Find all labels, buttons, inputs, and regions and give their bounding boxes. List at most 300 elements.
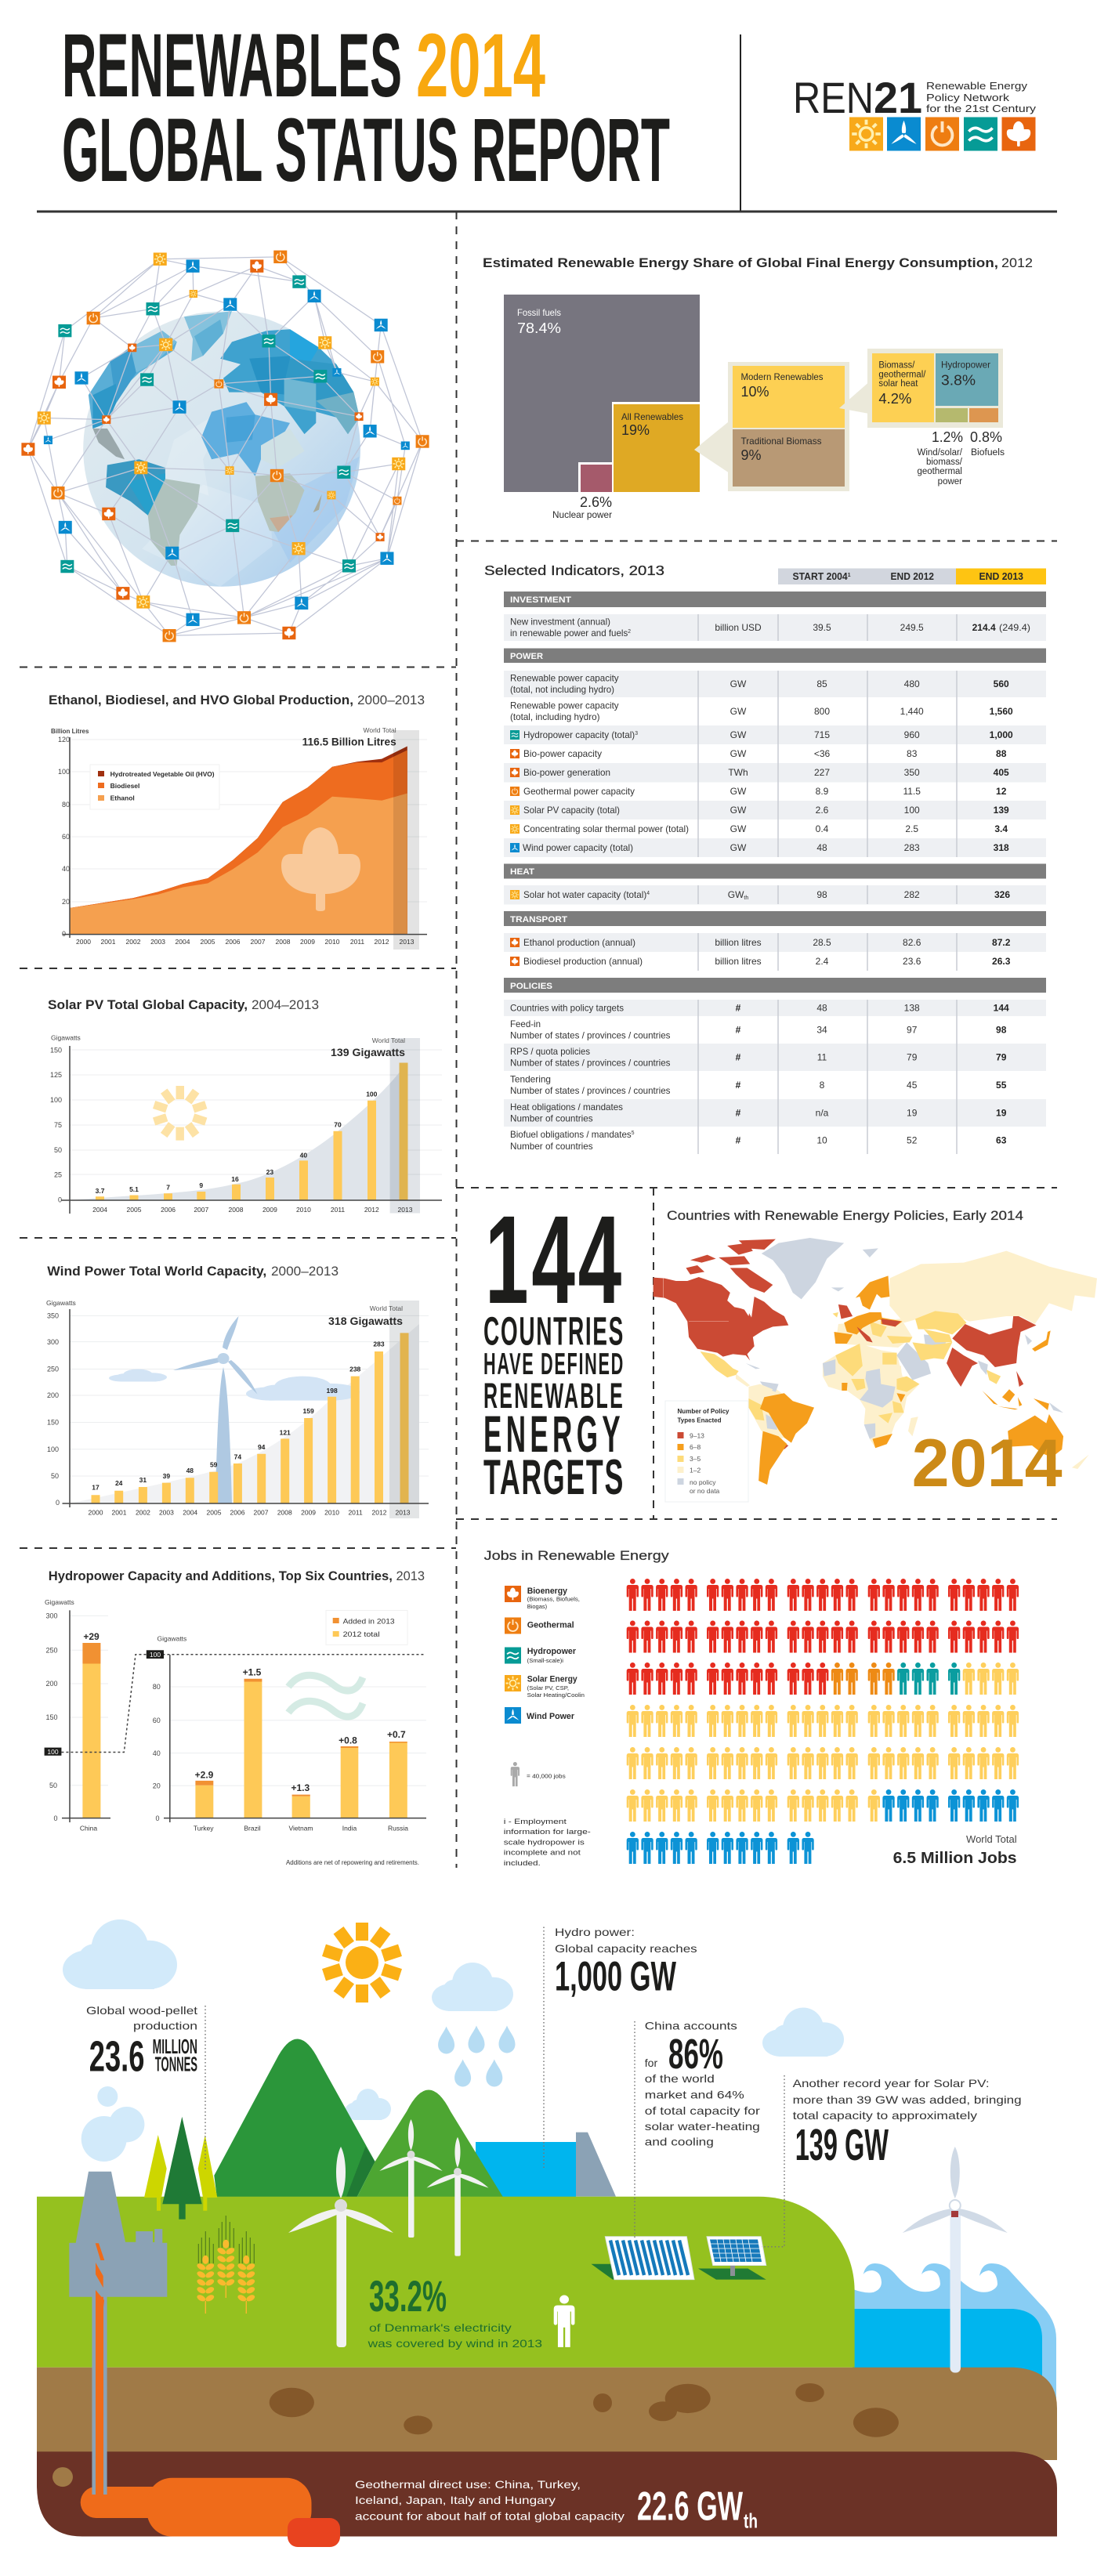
callout: 144 countries: HAVE DEFINED	[483, 1348, 625, 1381]
callout: wood pellets: production	[133, 2020, 197, 2032]
chart: solar PV capacity: 7	[166, 1183, 170, 1191]
table: selected indicators: in renewable power and fuels	[510, 628, 632, 639]
chart: ethanol, biodiesel and HVO area chart: 2006	[226, 938, 241, 946]
table: selected indicators: 2.4	[816, 956, 829, 967]
chart: wind power capacity: 2013	[396, 1509, 411, 1517]
chart: wind power capacity: 48	[186, 1467, 194, 1474]
chart: hydropower capacity and additions: Additions are net of repowering and retirements.	[286, 1859, 419, 1866]
icon: offshore wind turbine	[903, 2147, 1008, 2372]
table: selected indicators: Number of states / provinces / countries	[510, 1029, 671, 1040]
chart: hydropower capacity and additions: 0	[155, 1814, 160, 1822]
legend: jobs: Hydropower	[527, 1647, 577, 1656]
table: selected indicators: 715	[814, 729, 830, 740]
table: selected indicators: 2	[628, 629, 631, 635]
legend: jobs: incomplete and not	[504, 1849, 581, 1857]
icon: biomass leaf	[281, 827, 360, 911]
chart: wind power capacity: 24	[115, 1479, 123, 1487]
chart: wind power capacity: 100	[47, 1445, 59, 1453]
table: selected indicators: 82.6	[903, 937, 921, 948]
callout: Denmark wind: was covered by wind in 2013	[367, 2337, 542, 2350]
chart: solar PV capacity: 2005	[127, 1206, 142, 1214]
callout: China solar: China accounts	[645, 2020, 737, 2032]
chart: solar PV capacity: 5.1	[129, 1185, 139, 1193]
chart: solar PV capacity: 100	[50, 1096, 62, 1104]
icon: wind turbine large	[288, 2147, 393, 2347]
table: selected indicators: 405	[994, 767, 1009, 778]
chart: energy share treemap: Traditional Biomass	[741, 436, 821, 447]
chart: wind power capacity: Gigawatts	[46, 1299, 76, 1307]
table: selected indicators: GW	[730, 823, 747, 834]
table: selected indicators: Hydropower capacity (total)	[523, 729, 638, 740]
chart: ethanol, biodiesel and HVO area chart: 2010	[325, 938, 340, 946]
chart: wind power capacity: 94	[258, 1443, 266, 1451]
table: selected indicators: RPS / quota policies	[510, 1046, 590, 1057]
table: selected indicators: Feed-in	[510, 1018, 541, 1029]
chart: energy share treemap: biomass/	[926, 458, 963, 467]
callout: 144 countries: ENERGY	[483, 1405, 625, 1463]
chart: hydropower capacity and additions: Vietnam	[288, 1824, 313, 1832]
chart: solar PV capacity: 16	[231, 1175, 239, 1183]
soil stones	[270, 2383, 899, 2437]
table: selected indicators: 960	[904, 729, 920, 740]
table: selected indicators: POWER	[510, 652, 543, 661]
chart: ethanol, biodiesel and HVO area chart	[51, 726, 427, 950]
table: selected indicators: 480	[904, 678, 920, 689]
legend: policy types: 9–13	[690, 1432, 704, 1440]
REN21 logo: Renewable Energy	[926, 80, 1028, 92]
chart: hydropower capacity and additions: 200	[45, 1680, 58, 1688]
chart: wind power capacity: 121	[280, 1429, 291, 1437]
chart: wind power capacity: 2008	[277, 1509, 292, 1517]
table: selected indicators: Solar hot water capacity (total)	[523, 889, 650, 900]
legend: hydropower: 2012 total	[343, 1630, 380, 1639]
chart: energy share treemap: solar heat	[878, 379, 918, 389]
table: selected indicators: 10	[816, 1134, 827, 1145]
chart: wind power capacity: 350	[47, 1312, 59, 1319]
table: selected indicators: Wind power capacity (total)	[523, 842, 633, 853]
heading: ethanol chart: 2000–2013	[357, 693, 425, 707]
legend: policy types: Types Enacted	[677, 1416, 721, 1424]
callout: China solar: for	[645, 2057, 657, 2069]
legend: jobs: = 40,000 jobs	[527, 1772, 566, 1780]
legend: policy types: 3–5	[690, 1455, 701, 1463]
table: selected indicators: 282	[904, 889, 920, 900]
table: selected indicators: 214.4	[972, 622, 996, 633]
chart: wind power capacity: 318 Gigawatts	[328, 1315, 403, 1327]
land: bedrock	[37, 2451, 1057, 2537]
chart: energy share treemap: 1.2%	[932, 429, 963, 445]
chart: wind power capacity: 39	[163, 1472, 170, 1480]
callout: wood pellets: MILLION	[153, 2035, 197, 2058]
icon: cloud near hydro	[762, 2007, 844, 2057]
table: selected indicators: #	[736, 1051, 741, 1062]
table: selected indicators: 5	[632, 1131, 635, 1136]
icon: small cloud	[345, 2089, 391, 2120]
callout: China solar: 86%	[668, 2031, 723, 2078]
header title: RENEWABLES	[62, 16, 402, 116]
callout: geothermal: Geothermal direct use: China, Turkey,	[355, 2478, 581, 2491]
table: selected indicators: Number of states / provinces / countries	[510, 1085, 671, 1096]
chart: ethanol, biodiesel and HVO area chart: 2011	[350, 938, 364, 946]
table: selected indicators: GW	[728, 889, 744, 900]
chart: wind power capacity: 283	[373, 1340, 385, 1348]
callout: geothermal: Iceland, Japan, Italy and Hungary	[355, 2494, 556, 2506]
heading: energy share: 2012	[1001, 255, 1033, 270]
illustration: renewable energy landscape	[37, 1919, 1057, 2547]
table: selected indicators: 79	[907, 1051, 918, 1062]
table: selected indicators: 19	[996, 1108, 1007, 1119]
callout: solar PV: Another record year for Solar PV:	[793, 2077, 990, 2089]
table: selected indicators: Geothermal power capacity	[523, 786, 635, 797]
callout: geothermal: account for about half of total global capacity	[355, 2509, 625, 2522]
chart: solar PV capacity: 23	[266, 1168, 273, 1176]
chart: ethanol, biodiesel and HVO area chart: 2012	[375, 938, 389, 946]
legend: jobs: Geothermal	[527, 1620, 574, 1630]
callout: 144 countries: RENEWABLE	[483, 1376, 625, 1416]
chart: wind power capacity: World Total	[370, 1304, 403, 1312]
chart: energy share treemap: 19%	[621, 422, 650, 438]
legend: biofuels: Biodiesel	[110, 782, 139, 790]
table: selected indicators: 139	[994, 805, 1009, 816]
table: selected indicators: 144	[994, 1003, 1009, 1014]
table: selected indicators: 12	[996, 786, 1007, 797]
chart: ethanol, biodiesel and HVO area chart: 60	[62, 833, 70, 841]
chart: wind power capacity: 17	[92, 1484, 100, 1492]
table: selected indicators: <36	[814, 748, 831, 759]
chart: ethanol, biodiesel and HVO area chart: 2000	[76, 938, 91, 946]
table: selected indicators: 1,440	[900, 706, 924, 717]
chart: energy share treemap: 78.4%	[517, 320, 561, 336]
chart: solar PV capacity: 70	[334, 1120, 342, 1128]
legend: jobs: Biogas)	[527, 1603, 548, 1610]
sea water	[853, 2309, 1042, 2397]
pictogram: jobs by technology	[627, 1579, 1019, 1864]
chart: energy share treemap: 2.6%	[580, 494, 612, 510]
callout: solar PV: more than 39 GW was added, bringing	[793, 2093, 1022, 2106]
legend: biofuels	[90, 765, 219, 809]
chart: energy share treemap: geothermal	[917, 467, 962, 476]
table: selected indicators: GW	[730, 786, 747, 797]
table: selected indicators: 3.4	[994, 823, 1008, 834]
table: selected indicators: 48	[816, 842, 827, 853]
table: selected indicators: GW	[730, 678, 747, 689]
mountains	[214, 2039, 504, 2198]
chart: wind power capacity: 0	[56, 1499, 60, 1507]
chart: ethanol, biodiesel and HVO area chart: 20	[62, 898, 70, 906]
chart: energy share treemap: Biomass/	[878, 360, 915, 370]
chart: hydropower capacity and additions: 100	[150, 1651, 161, 1659]
chart: ethanol, biodiesel and HVO area chart: 2001	[101, 938, 116, 946]
callout: geothermal: th	[744, 2509, 758, 2533]
table: selected indicators: GW	[730, 748, 747, 759]
table: selected indicators: #	[736, 1003, 741, 1014]
header title: 2014	[416, 16, 545, 116]
legend: biofuels: Hydrotreated Vegetable Oil (HVO)	[110, 770, 215, 778]
table: selected indicators: (249.4)	[999, 622, 1030, 633]
icon: wind turbine small	[426, 2137, 489, 2256]
icon: geothermal plant with pipe	[69, 2086, 167, 2495]
chart: wind power capacity: 2002	[136, 1509, 150, 1517]
chart: ethanol, biodiesel and HVO area chart: 2003	[150, 938, 165, 946]
callout: hydro power	[555, 1926, 697, 1999]
chart: wind power capacity: 2004	[183, 1509, 197, 1517]
heading: ethanol chart: Ethanol, Biodiesel, and HVO Global Production,	[49, 693, 353, 707]
callout: hydro power: Global capacity reaches	[555, 1942, 697, 1955]
callout: China solar: of total capacity for	[645, 2104, 760, 2117]
chart: energy share treemap: 0.8%	[970, 429, 1002, 445]
table: selected indicators: 98	[816, 889, 827, 900]
callout: hydro power: 1,000 GW	[555, 1953, 676, 1999]
chart: hydropower capacity and additions: Gigawatts	[45, 1598, 74, 1606]
table: selected indicators: Bio-power capacity	[523, 748, 602, 759]
chart: wind power capacity: 2003	[159, 1509, 174, 1517]
chart: wind power capacity: 2001	[112, 1509, 127, 1517]
chart: ethanol, biodiesel and HVO area chart: 2002	[126, 938, 141, 946]
legend: policy types: or no data	[690, 1487, 720, 1495]
icon: sun	[153, 1086, 207, 1141]
table: selected indicators: 87.2	[992, 937, 1011, 948]
legend: jobs: (Small-scale)i	[527, 1657, 563, 1664]
callout: China solar: market and 64%	[645, 2089, 744, 2101]
table: selected indicators: 318	[994, 842, 1009, 853]
heading: solar chart: 2004–2013	[252, 997, 319, 1012]
chart: hydropower capacity and additions: 40	[153, 1749, 161, 1757]
table: selected indicators: 52	[907, 1134, 918, 1145]
REN21 logo: for the 21st Century	[926, 103, 1037, 114]
table: selected indicators: GW	[730, 729, 747, 740]
table: selected indicators: Bio-power generation	[523, 767, 610, 778]
table: selected indicators: TWh	[728, 767, 748, 778]
chart: solar PV capacity: 40	[300, 1152, 307, 1160]
chart: wind power capacity: 2010	[324, 1509, 339, 1517]
chart: solar PV capacity: 2012	[364, 1206, 379, 1214]
table: selected indicators: Concentrating solar thermal power (total)	[523, 823, 689, 834]
map: countries with renewable energy policies: 2014	[912, 1426, 1063, 1501]
chart: hydropower capacity and additions: +0.7	[387, 1729, 406, 1740]
icon: wheat	[196, 2216, 256, 2314]
table: selected indicators: Heat obligations / mandates	[510, 1102, 623, 1113]
table: selected indicators: END 2013	[979, 571, 1023, 582]
callout: geothermal	[355, 2478, 758, 2533]
chart: energy share treemap: Biofuels	[971, 448, 1005, 458]
chart: energy share treemap: 10%	[741, 384, 769, 400]
chart: hydropower capacity and additions: 50	[49, 1782, 57, 1789]
chart: wind power capacity: 2007	[254, 1509, 269, 1517]
chart: wind power capacity: 2011	[348, 1509, 363, 1517]
callout: Denmark wind	[367, 2271, 542, 2350]
table: selected indicators: 283	[904, 842, 920, 853]
chart: energy share treemap: Modern Renewables	[741, 371, 823, 382]
table: selected indicators: 249.5	[900, 622, 924, 633]
chart: hydropower capacity and additions: 250	[45, 1647, 58, 1655]
table: selected indicators: th	[744, 895, 748, 901]
table: selected indicators: 1,560	[990, 706, 1013, 717]
chart: hydropower capacity and additions: +0.8	[339, 1735, 357, 1746]
chart: hydropower capacity and additions: India	[342, 1824, 357, 1832]
chart: wind power capacity: 2000	[89, 1509, 103, 1517]
legend: jobs: information for large-	[504, 1828, 591, 1836]
table: selected indicators: Renewable power capacity	[510, 700, 619, 711]
table: selected indicators: 8	[820, 1080, 825, 1091]
table: selected indicators: 227	[814, 767, 830, 778]
chart: solar PV capacity: 2010	[296, 1206, 311, 1214]
legend: jobs: Bioenergy	[527, 1586, 568, 1596]
REN21 logo: REN	[793, 73, 874, 122]
table: selected indicators: END 2012	[890, 571, 934, 582]
chart: ethanol, biodiesel and HVO area chart: 100	[58, 768, 70, 776]
table: selected indicators: 28.5	[813, 937, 831, 948]
legend: policy types: no policy	[690, 1478, 716, 1486]
legend: hydropower	[326, 1611, 407, 1645]
sea waves	[853, 2263, 1056, 2413]
chart: wind power capacity: 198	[327, 1387, 338, 1395]
table: selected indicators: 88	[996, 748, 1007, 759]
icon: clouds and turbine	[109, 1316, 360, 1503]
table: selected indicators: GW	[730, 805, 747, 816]
icon: person	[554, 2296, 574, 2347]
table: selected indicators: Tendering	[510, 1073, 551, 1084]
chart: wind power capacity: 74	[234, 1453, 241, 1460]
callout: wood pellets: TONNES	[155, 2053, 197, 2076]
heading: jobs: Jobs in Renewable Energy	[484, 1548, 669, 1563]
icon: large cloud	[63, 1919, 177, 1989]
chart: solar PV capacity: 9	[199, 1181, 203, 1189]
chart: solar PV capacity: 125	[50, 1071, 62, 1079]
chart: wind power capacity: 200	[47, 1391, 59, 1399]
table: selected indicators: Biodiesel production (annual)	[523, 956, 643, 967]
chart: energy share treemap: geothermal/	[878, 370, 926, 379]
table: selected indicators: TRANSPORT	[510, 915, 567, 924]
heading: solar chart: Solar PV Total Global Capacity,	[48, 997, 248, 1012]
chart: energy share treemap: power	[938, 477, 962, 487]
heading: hydropower chart: Hydropower Capacity and Additions, Top Six Countries,	[49, 1568, 393, 1583]
table: selected indicators: 3	[635, 731, 638, 736]
legend: jobs: i - Employment	[504, 1818, 567, 1826]
legend: policy types	[665, 1401, 748, 1502]
chart: hydropower capacity and additions: 300	[45, 1612, 58, 1620]
chart: hydropower capacity and additions: 80	[153, 1683, 161, 1691]
legend: hydropower: Added in 2013	[343, 1617, 395, 1626]
chart: ethanol, biodiesel and HVO area chart: 116.5 Billion Litres	[302, 736, 396, 747]
table: selected indicators: billion USD	[715, 622, 762, 633]
chart: wind power capacity: 238	[349, 1365, 361, 1373]
table: selected indicators: 98	[996, 1025, 1007, 1036]
chart: wind power capacity: 150	[47, 1418, 59, 1426]
table: selected indicators: 8.9	[816, 786, 829, 797]
legend: jobs: scale hydropower is	[504, 1838, 585, 1847]
table: selected indicators: Renewable power capacity	[510, 672, 619, 683]
table: selected indicators: Number of states / provinces / countries	[510, 1058, 671, 1069]
chart: wind power capacity: 50	[51, 1472, 59, 1480]
table: selected indicators: Solar PV capacity (total)	[523, 805, 620, 816]
table: selected indicators: 79	[996, 1051, 1007, 1062]
table: selected indicators: 2.6	[816, 805, 829, 816]
land: grass	[37, 2197, 855, 2368]
callout: world total jobs: 6.5 Million Jobs	[893, 1850, 1017, 1867]
chart: solar PV capacity: 75	[54, 1121, 62, 1129]
map: countries with renewable energy policies	[653, 1238, 1097, 1502]
chart: solar PV capacity: 100	[366, 1091, 378, 1098]
chart: hydropower capacity and additions: China	[80, 1824, 97, 1832]
table: selected indicators: 39.5	[813, 622, 831, 633]
chart: ethanol, biodiesel and HVO area chart: 40	[62, 865, 70, 873]
REN21 logo	[793, 73, 1037, 150]
chart: ethanol, biodiesel and HVO area chart: 2007	[251, 938, 266, 946]
chart: wind power capacity: 250	[47, 1365, 59, 1373]
table: selected indicators: GW	[730, 842, 747, 853]
chart: solar PV capacity: 3.7	[96, 1187, 105, 1195]
chart: wind power capacity: 2006	[230, 1509, 245, 1517]
callout: 144 countries: TARGETS	[483, 1450, 625, 1505]
legend: jobs: Solar Heating/Coolin	[527, 1691, 585, 1699]
chart: solar PV capacity: 50	[54, 1146, 62, 1154]
table: selected indicators: Number of countries	[510, 1113, 593, 1123]
heading: policy map: Countries with Renewable Energy Policies, Early 2014	[667, 1208, 1023, 1223]
chart: solar PV capacity: 150	[50, 1047, 62, 1055]
REN21 logo: 21	[874, 73, 922, 122]
legend: jobs: (Solar PV, CSP,	[527, 1684, 569, 1691]
chart: hydropower capacity and additions: Russia	[388, 1824, 408, 1832]
table: selected indicators: 26.3	[992, 956, 1011, 967]
icon: sun	[322, 1923, 402, 2003]
legend: jobs: Solar Energy	[527, 1675, 578, 1684]
chart: wind power capacity	[46, 1299, 429, 1518]
table: selected indicators: GW	[730, 706, 747, 717]
icon: rain cloud	[432, 1963, 513, 2011]
chart: energy share treemap: Hydropower	[941, 359, 990, 370]
table: selected indicators: START 2004	[793, 571, 849, 582]
legend: biofuels: Ethanol	[110, 794, 135, 802]
icon: wind turbine medium	[379, 2119, 443, 2238]
callout: geothermal: 22.6 GW	[637, 2484, 744, 2529]
chart: wind power capacity: 2009	[301, 1509, 316, 1517]
table: selected indicators: 350	[904, 767, 920, 778]
callout: Denmark wind: 33.2%	[369, 2271, 447, 2321]
chart: solar PV capacity: 2006	[161, 1206, 176, 1214]
lake and dam	[476, 2133, 616, 2198]
table: selected indicators: (total, including hydro)	[510, 711, 600, 722]
table: selected indicators: 800	[814, 706, 830, 717]
chart: hydropower capacity and additions: +1.5	[243, 1667, 262, 1678]
table: selected indicators: #	[736, 1025, 741, 1036]
chart: ethanol, biodiesel and HVO area chart: 0	[62, 930, 66, 938]
table: selected indicators: 97	[907, 1025, 918, 1036]
chart: solar PV capacity	[50, 1034, 442, 1214]
callout: wood pellets	[86, 2004, 197, 2081]
chart: solar PV capacity: World Total	[372, 1037, 405, 1044]
table: selected indicators: New investment (annual)	[510, 616, 610, 627]
table: selected indicators	[504, 569, 1046, 1154]
land: soil	[37, 2368, 1057, 2460]
chart: energy share treemap: 3.8%	[941, 373, 976, 389]
table: selected indicators: INVESTMENT	[510, 595, 571, 605]
table: selected indicators: 100	[904, 805, 920, 816]
chart: solar PV capacity: 2009	[262, 1206, 277, 1214]
table: selected indicators: 11.5	[903, 786, 921, 797]
callout: China solar	[645, 2020, 760, 2148]
table: selected indicators: 11	[817, 1051, 827, 1062]
chart: hydropower capacity and additions: 60	[153, 1717, 161, 1724]
chart: energy share treemap	[504, 295, 1005, 520]
legend: policy types: 1–2	[690, 1467, 701, 1474]
chart: hydropower capacity and additions: 0	[53, 1814, 58, 1822]
chart: ethanol, biodiesel and HVO area chart: 2004	[176, 938, 190, 946]
magma pool	[81, 2478, 340, 2547]
table: selected indicators: 45	[907, 1080, 918, 1091]
callout: wood pellets: Global wood-pellet	[86, 2004, 197, 2017]
chart: solar PV capacity: 139 Gigawatts	[331, 1047, 405, 1058]
chart: energy share treemap: Nuclear power	[552, 509, 612, 520]
